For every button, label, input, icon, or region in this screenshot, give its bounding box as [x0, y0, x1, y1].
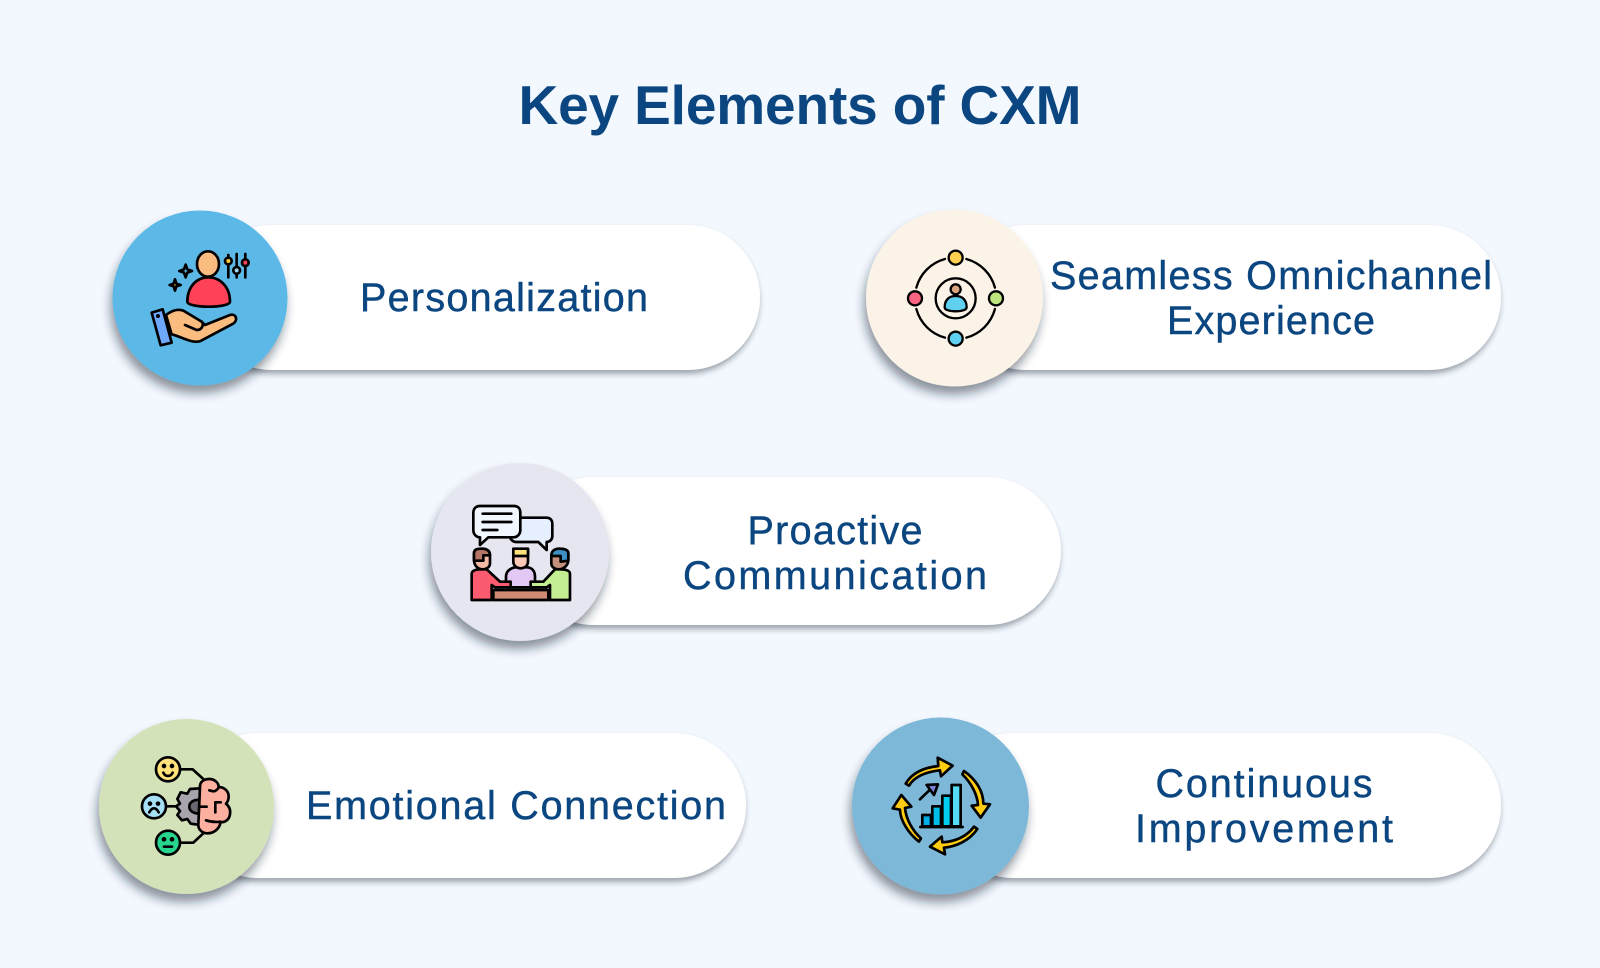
icon: orbit with person [908, 251, 1003, 346]
icon circle: emotional [99, 719, 274, 894]
pill: omnichannel [954, 225, 1501, 370]
panel: personalization [112, 210, 760, 386]
label: communication: Communication [683, 554, 987, 598]
icon circle: personalization [112, 210, 288, 386]
icon: hand holding person [152, 251, 249, 345]
panel: continuous improvement [852, 718, 1501, 894]
label: omnichannel: Seamless Omnichannel [1050, 254, 1492, 298]
icon: improvement cycle with bar chart [893, 758, 990, 854]
icon: brain, gear and emotion faces [142, 757, 230, 855]
icon circle: continuous [852, 718, 1029, 894]
label: continuous: Continuous [1156, 762, 1372, 806]
label: emotional: Emotional Connection [306, 784, 726, 828]
icon: team meeting with speech bubbles [472, 506, 570, 600]
panel: proactive communication [431, 463, 1061, 641]
pill: emotional [186, 733, 746, 878]
icon circle: proactive [431, 463, 609, 641]
label: experience: Experience [1167, 299, 1375, 343]
pill: continuous [941, 733, 1501, 878]
icon circle: omnichannel [866, 210, 1043, 386]
label: personalization: Personalization [360, 276, 648, 320]
label: improvement: Improvement [1135, 807, 1393, 851]
label: proactive: Proactive [748, 509, 922, 553]
pill: personalization [200, 225, 760, 370]
panel: seamless omnichannel experience [866, 210, 1501, 386]
title: Key Elements of CXM [518, 74, 1082, 136]
panel: emotional connection [99, 719, 746, 894]
pill: proactive [520, 477, 1061, 625]
